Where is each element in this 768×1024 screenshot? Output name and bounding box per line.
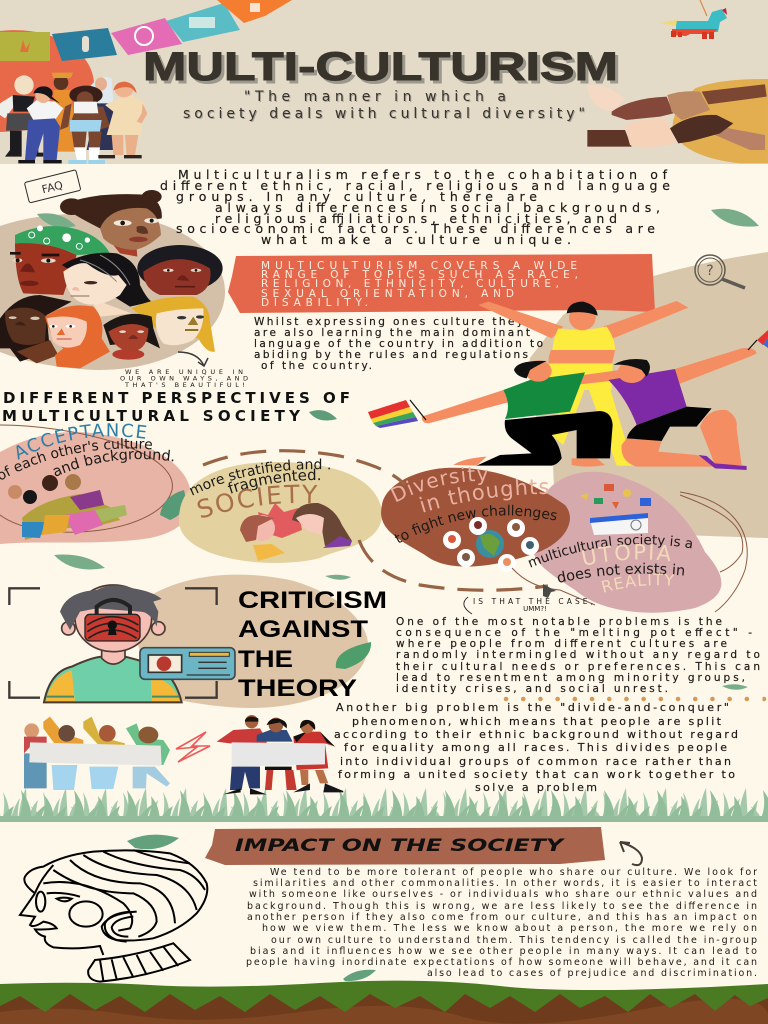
text: melting pot paragraph: consequence of the "melting pot effect" - — [396, 627, 752, 639]
text: and background: and background. — [54, 450, 174, 476]
icon: lightning bolt — [176, 732, 210, 762]
text: whilst paragraph — [254, 316, 543, 372]
text: does not exists: does not exists in — [558, 562, 684, 582]
text: whilst paragraph: are also learning the main dominant — [254, 327, 530, 339]
icon: leaf — [309, 410, 337, 420]
heading: society: SOCIETY — [198, 484, 318, 518]
callout: red brush banner — [228, 254, 655, 313]
text: whilst paragraph: abiding by the rules and regulations — [254, 349, 528, 361]
text: divide and conquer paragraph: phenomenon, which means that people are split — [352, 715, 722, 728]
heading: criticism against the theory: THE — [238, 646, 293, 673]
panel: utopia blob — [532, 472, 721, 613]
panel: acceptance blob — [0, 423, 190, 544]
FAQ tag icon — [24, 170, 81, 203]
icon: rainbow flag right — [748, 330, 768, 350]
icon: leaf — [722, 684, 748, 690]
intro paragraph — [160, 167, 670, 247]
three people with flags illustration — [368, 301, 768, 470]
dotted divider — [506, 697, 764, 701]
ground: soil and grass — [0, 981, 768, 1024]
text: melting pot paragraph: randomly intermingled without any regard to — [396, 649, 760, 661]
person: yellow top — [478, 301, 688, 466]
person: green shirt — [422, 360, 613, 467]
text: impact paragraph: another person if they also come from our culture, and this has an impact on — [247, 912, 757, 923]
callout: red brush banner: RELIGION, ETHNICITY, CULTURE, — [261, 278, 559, 290]
heading: diversity: Diversity — [390, 466, 488, 502]
text: impact paragraph: similarities and other commonalities. In other words, it is easier to interact — [253, 878, 757, 889]
text: melting pot paragraph — [396, 616, 760, 695]
intro paragraph: Multiculturalism refers to the cohabitation of — [178, 167, 668, 182]
corner brackets — [9, 588, 217, 698]
heading: different perspectives: MULTICULTURAL SOCIETY — [2, 407, 301, 425]
caption: we are unique — [120, 352, 248, 389]
icon: leaf — [160, 490, 185, 520]
person: purple shirt — [608, 348, 757, 470]
FAQ tag icon: FAQ — [40, 178, 65, 196]
text: melting pot paragraph: their cultural needs or preferences. This can — [396, 661, 760, 673]
text: impact paragraph: how we view them. The less we know about a person, the more we rely on — [262, 923, 757, 934]
face: woman with buns — [60, 190, 162, 257]
callout: red brush banner: RANGE OF TOPICS SUCH AS RACE, — [261, 269, 578, 281]
icon: arrow head — [543, 584, 556, 598]
subtitle: "The manner in which a — [245, 90, 507, 106]
panel: society blob — [179, 458, 382, 563]
person with fingerprint lock illustration — [9, 585, 235, 702]
face: curly hair — [137, 245, 223, 295]
heading: criticism against the theory: THEORY — [238, 675, 357, 702]
text: whilst paragraph: of the country. — [261, 360, 372, 372]
subtitle: society deals with cultural diversity" — [184, 107, 586, 123]
icon: curved arrow — [178, 352, 208, 366]
callout: red brush banner: MULTICULTURISM COVERS A WIDE — [261, 260, 577, 272]
heading banner: impact on the society: IMPACT ON THE SOCIETY — [235, 836, 565, 856]
text: whilst paragraph: Whilst expressing ones culture they — [254, 316, 523, 328]
person: purple shirt arm behind — [580, 370, 633, 384]
caption: is that the case: IS THAT THE CASE, — [473, 597, 593, 606]
caption: is that the case: UMM?! — [523, 605, 547, 613]
text: melting pot paragraph: where people from different cultures are — [396, 638, 727, 650]
icon: rainbow flag left — [368, 400, 426, 428]
line art head illustration — [20, 850, 207, 982]
text: divide and conquer paragraph: into individual groups of common race rather than — [340, 755, 731, 768]
text: impact paragraph: people having inordinate expectations of how someone will behave, and it can — [246, 957, 757, 968]
icon: leaf — [336, 642, 371, 669]
icon: magnifying glass — [695, 255, 745, 288]
protest group right illustration — [217, 715, 343, 794]
face: blonde woman — [132, 296, 215, 352]
intro paragraph: always differences in social backgrounds, — [215, 200, 660, 215]
icon: leaf — [37, 213, 76, 228]
faces group — [0, 190, 223, 368]
intro paragraph: socioeconomic factors. These differences are — [176, 221, 655, 236]
face: east asian woman — [62, 253, 152, 317]
bunting flags — [0, 0, 292, 61]
protest group left illustration — [24, 717, 170, 790]
icon: curved arrow — [620, 842, 642, 865]
subtitle: "The manner in which a — [244, 89, 506, 105]
caption: we are unique: WE ARE UNIQUE IN — [125, 368, 243, 376]
text: impact paragraph: with someone like ourselves - or individuals who share our ethnic values and — [249, 889, 757, 900]
joined hands illustration — [587, 79, 768, 163]
heading: criticism against the theory: CRITICISM — [238, 587, 387, 614]
text: melting pot paragraph: identity crises, and social unrest. — [396, 683, 668, 695]
face: child — [103, 314, 160, 360]
heading: criticism against the theory — [238, 587, 387, 702]
title: MULTI-CULTURISM — [143, 45, 618, 89]
text: divide and conquer paragraph: according to their ethnic background without regard — [334, 728, 738, 741]
subtitle — [183, 89, 586, 123]
id card — [140, 648, 235, 679]
intro paragraph: different ethnic, racial, religious and language — [160, 178, 670, 193]
icon: pinata — [660, 0, 727, 39]
text: impact paragraph: our own culture to understand them. This tendency is called the in-group — [271, 935, 757, 946]
text: impact paragraph — [246, 867, 757, 979]
text: melting pot paragraph: One of the most notable problems is the — [396, 616, 722, 628]
text: impact paragraph: background. Though this is wrong, we are less likely to see the difference in — [247, 901, 757, 912]
text: whilst paragraph: language of the country in addition to — [254, 338, 543, 350]
panel: tan circle with faces — [0, 190, 225, 370]
text: to fight new challenges: to fight new challenges — [394, 504, 557, 543]
face: woman with braids — [0, 295, 72, 363]
caption: we are unique: OUR OWN WAYS, AND — [120, 374, 248, 382]
icon: leaf — [54, 555, 105, 569]
text: melting pot paragraph: lead to resentment among minority groups, — [396, 672, 745, 684]
orange blob behind people — [0, 30, 94, 132]
heading: reality: REALITY — [602, 574, 674, 592]
heading: acceptance: ACCEPTANCE — [16, 423, 146, 460]
face: man in bandana — [10, 225, 110, 295]
icon: magnifying glass: ? — [706, 263, 714, 279]
heading: in thoughts: in thoughts — [419, 479, 548, 512]
intro paragraph: religious affiliations, ethnicities, and — [215, 211, 617, 226]
text: impact paragraph: We tend to be more tolerant of people who share our culture. We look for — [270, 867, 757, 878]
globe with portraits — [443, 517, 539, 572]
icon: leaf — [325, 575, 351, 580]
text: fragmented: fragmented. — [228, 468, 320, 494]
caption: we are unique: THAT'S BEAUTIFUL! — [124, 381, 245, 389]
gift box illustration — [580, 484, 651, 535]
text: divide and conquer paragraph: solve a problem — [475, 781, 597, 794]
face: woman in orange hijab — [45, 305, 110, 368]
panel: diversity blob — [381, 466, 570, 572]
intro paragraph: groups. In any culture, there are — [176, 189, 537, 204]
text: divide and conquer paragraph: Another big problem is the "divide-and-conquer" — [336, 701, 729, 714]
caption: is that the case — [464, 597, 593, 614]
panel: criticism tan blob — [130, 575, 368, 708]
hugging group illustration — [8, 474, 127, 540]
heading: criticism against the theory: AGAINST — [238, 616, 368, 643]
large tan blob right — [529, 252, 768, 538]
grass strip — [0, 786, 768, 822]
title: MULTI-CULTURISM — [146, 48, 621, 92]
text: multicultural society: multicultural society is a — [528, 534, 692, 568]
icon: leaf — [343, 970, 376, 981]
header band — [0, 0, 768, 164]
text: more stratified: more stratified and . — [190, 458, 330, 496]
group of people illustration — [0, 73, 147, 164]
heading banner: impact on the society — [205, 827, 605, 865]
text: divide and conquer paragraph: for equality among all races. This divides people — [344, 741, 727, 754]
utopia panel contents — [512, 484, 748, 612]
heading: different perspectives — [2, 389, 350, 425]
arguing couple illustration — [240, 503, 352, 561]
intro paragraph: what make a culture unique. — [261, 232, 571, 247]
callout: red brush banner: SEXUAL ORIENTATION, AND — [261, 288, 514, 300]
dashed circular arrow — [203, 451, 548, 590]
icon: leaf — [127, 835, 179, 849]
text: divide and conquer paragraph: forming a united society that can work together to — [338, 768, 735, 781]
callout: red brush banner: DISABILITY. — [261, 297, 368, 309]
heading: utopia: UTOPIA — [582, 544, 670, 565]
text: impact paragraph: also lead to cases of prejudice and discrimination. — [427, 968, 757, 979]
subtitle: society deals with cultural diversity" — [183, 106, 585, 122]
text: impact paragraph: bias and it influences how we see other people in many ways. It can lead to — [250, 946, 757, 957]
icon: leaf — [711, 209, 759, 227]
heading: different perspectives: DIFFERENT PERSPECTIVES OF — [3, 389, 350, 407]
text: divide and conquer paragraph — [334, 701, 738, 794]
